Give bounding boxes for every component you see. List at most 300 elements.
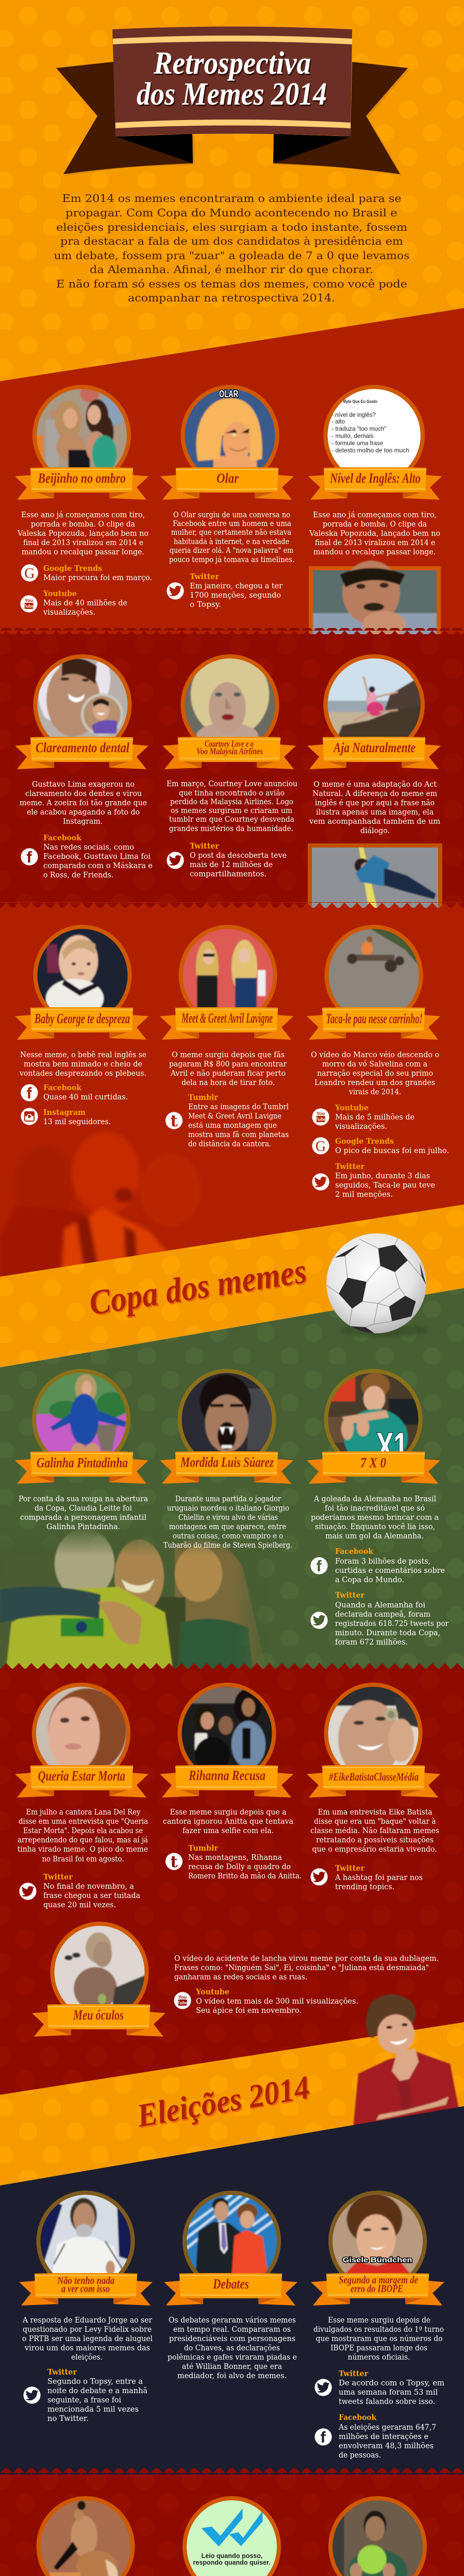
ribbon: Mordida Luis Suárez: Mordida Luis Súarez [180, 1454, 274, 1470]
ribbon: Clareamento dental [15, 737, 148, 769]
stat: Youtube: Youtube [43, 589, 77, 598]
stat: Twitter: 1700 menções, segundo [190, 591, 281, 600]
text: Clareamento description: ele acabou apagando a foto do [27, 808, 140, 817]
stat: Youtube [174, 1988, 358, 2015]
text: Queria Estar Morta description: Estar Morta". Depois ela acabou se [23, 1827, 143, 1835]
photo: 7 X 0: X1 [376, 1424, 408, 1469]
photo: Rihanna and Anitta [177, 1683, 276, 1784]
stat: Facebook: envolveram 48,3 milhões [339, 2442, 434, 2450]
stat: Twitter: no Twitter. [47, 2415, 89, 2423]
text: Courtney description: os memes surgiram e criaram um [171, 807, 292, 815]
ribbon: 7 X 0: 7 X 0 [360, 1455, 386, 1470]
section background: dark red after World Cup [0, 1663, 464, 2107]
stat: Facebook: Facebook [43, 834, 82, 842]
ribbon: Olar [160, 467, 294, 500]
stat: Youtube: Mais de 40 milhões de [43, 599, 127, 607]
text: Clareamento description: meme. A zoeira foi tão grande que [20, 799, 147, 807]
card: Galinha Pintadinha [15, 1369, 148, 1531]
section background: red diagonal [0, 308, 464, 641]
stat: Facebook: Facebook, Gusttavo Lima foi [43, 853, 151, 861]
text: Beijinho description: Esse ano já começamos com tiro, [21, 511, 145, 519]
text: Taca-le pau description: Leandro rendeu um dos grandes [314, 1079, 435, 1087]
stat: Twitter: frase chegou a ser tuitada [43, 1892, 140, 1900]
section background: green field [0, 1288, 464, 1669]
ribbon: Meu óculos: Meu óculos [73, 2007, 124, 2023]
heading: main title [137, 46, 327, 112]
section background: navy [0, 2106, 464, 2475]
card: Atualização do Whatsapp [164, 2496, 297, 2576]
card: Aja Naturalmente [307, 654, 442, 909]
text: Rihanna description: Esse meme surgiu depois que a [170, 1808, 287, 1817]
text: Nível de Inglês description: Valeska Popozuda, lançado bem no [309, 530, 440, 538]
text: Eike description [310, 1808, 439, 1854]
stat: Facebook: Facebook [43, 1083, 82, 1092]
photo: Beijinho no ombro [32, 385, 131, 468]
stat: Twitter [310, 1864, 423, 1891]
stat: Instagram [21, 1108, 111, 1126]
text: Debates description [168, 2316, 297, 2380]
text: Nível de Inglês description: final de 2013 viralizou em 2014 e [315, 539, 435, 547]
stat: Facebook: Foram 3 bilhões de posts, [335, 1557, 430, 1566]
photo: tweet screenshot: - formule uma frase [332, 439, 383, 447]
ribbon: Beijinho no ombro: Beijinho no ombro [38, 470, 126, 486]
ribbon: Rihanna Recusa [160, 1765, 293, 1798]
text: Taca-le pau description: virais de 2014. [349, 1088, 401, 1096]
text: Baby George description [19, 1051, 146, 1078]
stat: Tumblr [165, 1844, 302, 1880]
band: orange Eleições 2014 [0, 2022, 464, 2187]
ribbon: Queria Estar Morta [15, 1765, 148, 1798]
ribbon: Galinha Pintadinha [15, 1451, 148, 1484]
text: Aja description: vem acompanhada também de um [309, 818, 440, 826]
text: Courtney description: Em março, Courtney Love anunciou [167, 780, 297, 788]
ribbon: Rihanna Recusa: Rihanna Recusa [188, 1768, 266, 1783]
photo: Whatsapp checks: respondo quando quiser. [193, 2559, 270, 2566]
photo: Eike Batista [324, 1683, 423, 1784]
stat: Twitter: mencionada 5 mil vezes [47, 2405, 139, 2414]
stat: Tumblr: recusa de Dolly a quadro do [188, 1863, 291, 1871]
ribbon: Queria Estar Morta: Queria Estar Morta [38, 1768, 125, 1784]
stat: Tumblr: Romero Britto da mão da Anitta. [188, 1872, 302, 1880]
text: Nível de Inglês description: Esse ano já começamos com tiro, [313, 511, 437, 519]
text: Clareamento description [20, 781, 147, 826]
stat: Tumblr: Nas montagens, Rihanna [188, 1854, 282, 1862]
stat: Facebook: Quase 40 mil curtidas. [43, 1093, 128, 1101]
stat: Instagram: 13 mil seguidores. [43, 1118, 111, 1126]
stat: Twitter: compartilhamentos. [190, 870, 267, 878]
stat: Youtube [312, 1104, 415, 1131]
text: Aja description: Natural. A diferença do meme em [312, 790, 437, 798]
text: Meet & Greet description: pagaram R$ 800 para encontrar [169, 1060, 287, 1069]
text: 7 X 0 description: situação. Enquanto você lia isso, [315, 1523, 435, 1531]
text: Olar description: queria dizer olá. A "nova palavra" em [170, 547, 293, 555]
text: Queria Estar Morta description: tinha virado meme. O pico do meme [18, 1845, 148, 1854]
text: Queria Estar Morta description: disse em uma entrevista que "Queria [19, 1818, 148, 1826]
text: Eduardo Jorge description: o PRTB ser uma legenda de aluguel [22, 2335, 153, 2343]
card: Beijinho no ombro [15, 384, 152, 617]
card: 7 X 0 [307, 1369, 449, 1647]
section: fifth meme row [19, 2496, 447, 2576]
title banner [56, 27, 410, 176]
ribbon: Olar: Olar [217, 470, 239, 486]
text: Taca-le pau description: morro da vó Salvelina com a [322, 1060, 427, 1069]
text: Meu óculos description [174, 1955, 439, 1981]
stat: Tumblr: Meet & Greet Avril Lavigne [188, 1112, 281, 1121]
stat: Twitter: o Topsy. [190, 601, 221, 609]
text: Nível de Inglês description: porrada e bomba. O clipe da [323, 520, 427, 529]
stat: Twitter [314, 2369, 444, 2406]
text: Eike description: classe média. Não faltaram memes [310, 1827, 439, 1835]
stat: Twitter: Segundo o Topsy, entre a [47, 2378, 143, 2386]
stat: Youtube: Mais de 5 milhões de [335, 1113, 415, 1122]
text block: introduction: da Alemanha. Afinal, é melhor rir do que chorar. [90, 263, 373, 276]
ribbon: 7 X 0 [307, 1451, 440, 1484]
heading: Eleições 2014: Eleições 2014 [134, 2069, 312, 2134]
stat: Twitter: mais de 12 milhões de [190, 861, 273, 869]
card: Queria Estar Morta [15, 1683, 148, 1909]
ribbon: Meu óculos [32, 2004, 165, 2037]
ribbon: Meet & Greet: Meet & Greet Avril Lavigne [181, 1010, 273, 1026]
stat: Twitter: registrados 618.725 tweets por [335, 1620, 449, 1628]
photo: Meu óculos [51, 1922, 148, 2023]
stat: Twitter [310, 1591, 449, 1647]
stat: Twitter: Em janeiro, chegou a ter [190, 582, 283, 590]
photo frame: woman lying on road [308, 843, 442, 909]
stat: Twitter [19, 1873, 140, 1909]
band: orange Copa dos memes [0, 1205, 464, 1367]
text: Baby George description: Nesse meme, o bebê real inglês se [20, 1051, 146, 1059]
text: Clareamento description: clareamento dos dentes e virou [25, 790, 142, 798]
section background: dark red zigzag [0, 628, 464, 908]
text: Rihanna description: cantora ignorou Anitta que tentava [163, 1818, 293, 1826]
text: Clareamento description: Gusttavo Lima exagerou no [32, 781, 135, 789]
stat: Google Trends: Google Trends [43, 564, 102, 573]
background photo: hug tinted green [0, 1528, 268, 1669]
card: Olar [160, 385, 294, 609]
text: Taca-le pau description: narração especial do seu primo [317, 1070, 433, 1078]
ribbon: Debates: Debates [212, 2276, 249, 2292]
section: second meme row [0, 652, 464, 2576]
text: Queria Estar Morta description: arrependendo do que falou, mas aí já [18, 1836, 148, 1844]
text: Suárez description: uruguaio mordeu o italiano Giorgio [167, 1504, 289, 1513]
ribbon: Mordida Luis Suárez [160, 1451, 293, 1484]
card: Debates [164, 2191, 297, 2380]
photo: Aja Naturalmente [323, 654, 425, 755]
text block: introduction: propagar. Com Copa do Mundo acontecendo no Brasil e [65, 207, 397, 219]
stat: Facebook [310, 1547, 445, 1584]
icon: soccer ball [326, 1233, 428, 1336]
card: Meet & Greet [160, 925, 293, 1148]
card: Baby George [15, 925, 148, 1126]
stat: Twitter: minuto. Durante toda Copa, [335, 1629, 440, 1637]
card: Taca-le pau [307, 925, 449, 1199]
card: Meu óculos [32, 1922, 439, 2037]
text: Beijinho description: Valeska Popozuda, lançado bem no [17, 530, 148, 538]
card: Abundância [19, 2496, 155, 2576]
text block: introduction: acompanhar na retrospectiva 2014. [128, 292, 335, 304]
text: Meet & Greet description: O meme surgiu depois que fãs [172, 1051, 285, 1059]
stat: Twitter [167, 842, 287, 878]
text: Galinha description: Galinha Pintadinha. [46, 1523, 120, 1531]
card: Courtney Love [162, 652, 297, 878]
text: Beijinho description: final de 2013 viralizou em 2014 e [23, 539, 143, 547]
stat: Twitter: A hashtag foi parar nos [335, 1874, 423, 1882]
background: orange dotted header [0, 0, 464, 392]
text: Beijinho description [17, 511, 148, 556]
text: Taca-le pau description [311, 1051, 439, 1096]
text: Aja description [309, 781, 440, 835]
heading: main title: Retrospectiva [153, 46, 311, 81]
stat: Twitter: Twitter [335, 1162, 364, 1171]
stat: Tumblr: está uma montagem que [188, 1122, 277, 1130]
stat: Twitter: uma semana foram 53 mil [339, 2388, 438, 2397]
stat: Google Trends: Maior procura foi em março. [43, 574, 152, 582]
text block: introduction: pra destacar a fala de um dos candidatos à presidência em [60, 235, 403, 247]
stat: Twitter [167, 572, 283, 609]
stat: Google Trends [312, 1137, 449, 1155]
ribbon: Galinha Pintadinha: Galinha Pintadinha [37, 1455, 128, 1470]
text: Courtney description: tumblr em que Courtney desvenda [169, 816, 294, 824]
photo: Olar [180, 385, 279, 468]
ribbon: EikeBatistaClasseMédia [307, 1765, 440, 1798]
ribbon: Meet & Greet [160, 1007, 293, 1040]
text: Eike description: que o empresário estaria vivendo. [312, 1845, 437, 1854]
card: Rihanna Recusa [160, 1683, 302, 1880]
stat: Facebook: a Copa do Mundo. [335, 1576, 404, 1584]
text block: introduction: um debate, fossem pra "zuar" a goleada de 7 a 0 que levamos [54, 249, 409, 262]
stat: Tumblr: de distância da cantora. [188, 1140, 271, 1148]
photo: tweet screenshot: - muito, demais [332, 432, 374, 439]
text: 7 X 0 description [311, 1495, 439, 1540]
stat: Facebook: comparado com o Máskara e [43, 862, 153, 870]
stat: Tumblr [165, 1093, 289, 1148]
text: Eike description: retratando a possíveis situações [316, 1836, 434, 1844]
ribbon: Clareamento dental: Clareamento dental [36, 740, 129, 755]
background photo: crying baby tinted red [0, 1132, 217, 1278]
ribbon: Baby George [15, 1007, 148, 1040]
text: Debates description: do Chaves, as declarações [184, 2344, 280, 2352]
stat: Facebook [21, 1083, 128, 1102]
photo: Ônibus ou goiaba [328, 2496, 427, 2576]
ribbon: Não tenho nada a ver com isso: a ver com isso [61, 2283, 110, 2295]
text: Galinha description: comparada a personagem infantil [20, 1514, 146, 1522]
stat: Facebook: Facebook [339, 2413, 377, 2422]
ribbon: Courtney Love [162, 737, 296, 769]
photo: Dilma cutout [353, 1994, 459, 2133]
stat: Youtube: O vídeo tem mais de 300 mil visualizações. [196, 1997, 358, 2006]
text: Suárez description [163, 1495, 292, 1550]
photo: Lana Del Rey [32, 1683, 130, 1784]
text: Courtney description: grandes mistérios da humanidade. [169, 825, 293, 833]
text: Debates description: presidenciáveis com personagens [169, 2335, 295, 2343]
ribbon: Beijinho no ombro [15, 467, 148, 500]
card: Ônibus ou goiaba [311, 2496, 447, 2576]
text: 7 X 0 description: poderíamos mesmo brincar com a [311, 1514, 439, 1522]
card: Mordida Luis Suárez [160, 1369, 293, 1550]
stat: Twitter: 2 mil menções. [335, 1191, 393, 1199]
text: Rihanna description: fazer uma selfie com ela. [183, 1827, 274, 1835]
text block: introduction [54, 192, 409, 304]
text: Rihanna description [163, 1808, 293, 1835]
text: Clareamento description: Instagram. [63, 818, 103, 826]
stat: Youtube: visualizações. [43, 608, 95, 617]
stat: Twitter: Twitter [339, 2369, 368, 2378]
stat: Twitter: quase 20 mil vezes. [43, 1901, 116, 1909]
text: Taca-le pau description: O vídeo do Marco véio descendo o [311, 1051, 439, 1059]
stat: Facebook: milhões de interações e [339, 2433, 428, 2441]
ribbon: Não tenho nada a ver com isso [19, 2273, 153, 2306]
stat: Google Trends: O pico de buscas foi em julho. [335, 1147, 449, 1155]
stat: Instagram: Instagram [43, 1108, 86, 1117]
text block: introduction: eleições presidenciais, eles surgiam a todo instante, fossem [56, 221, 407, 233]
ribbon: Segundo a margem de erro do IBOPE: erro do IBOPE [351, 2282, 403, 2295]
text block: introduction: E não foram só esses os temas dos memes, como você pode [56, 278, 407, 290]
stat: Tumblr: mostra uma fã com planetas [188, 1131, 289, 1139]
card: Não tenho nada a ver com isso [19, 2191, 153, 2423]
text: Eike description: Em uma entrevista Eike Batista [318, 1808, 433, 1817]
ribbon: Aja Naturalmente: Aja Naturalmente [333, 740, 416, 755]
stat: Tumblr: Tumblr [188, 1093, 218, 1102]
card: Clareamento dental [15, 654, 153, 879]
ribbon: Debates [164, 2273, 297, 2306]
text: Nível de Inglês description: mandou o recalque passar longe. [313, 548, 436, 556]
stat: Youtube: Seu ápice foi em novembro. [196, 2007, 302, 2015]
text: Olar description: Facebook entre um homem e uma [173, 520, 291, 528]
stat: Google Trends: Google Trends [335, 1137, 394, 1146]
text: Meu óculos description: ganharam as redes sociais e as ruas. [174, 1973, 307, 1981]
text: Eduardo Jorge description: eleições. [71, 2353, 103, 2362]
text: Nível de Inglês description [309, 511, 440, 556]
photo: Olar: OLAR [219, 389, 238, 400]
text: 7 X 0 description: mais um gol da Alemanha. [325, 1532, 424, 1540]
stat: Tumblr: Entre as imagens do Tumbrl [188, 1103, 289, 1111]
photo: 7 X 0 [324, 1369, 423, 1470]
stat: Facebook [314, 2413, 436, 2460]
stat: Twitter: Twitter [47, 2368, 77, 2377]
ribbon: Taca-le pau [307, 1007, 440, 1040]
ribbon: Segundo a margem de erro do IBOPE [311, 2273, 444, 2306]
photo: tweet screenshot [323, 385, 425, 468]
ribbon: Nível de Inglês [308, 467, 442, 500]
text: Aja description: inglês é que por aqui a frase não [315, 799, 435, 807]
text: Meet & Greet description: Avril e não puderam ficar perto [170, 1070, 286, 1078]
text: IBOPE description [313, 2316, 444, 2362]
text: Aja description: diálogo. [360, 827, 390, 835]
photo: Dilma as Gisele: Gisele Bündchen [342, 2256, 412, 2264]
text: Courtney description [167, 780, 297, 833]
text: Galinha description: Por conta da sua roupa na abertura [19, 1495, 148, 1503]
text: Suárez description: outras coisas, como vampiro e o [173, 1532, 283, 1540]
photo: Whatsapp checks: Leio quando posso, [201, 2552, 262, 2560]
text: Eike description: disse que era um "baque" voltar à [314, 1817, 436, 1826]
text: Queria Estar Morta description [18, 1808, 148, 1863]
photo: Eduardo Jorge [36, 2191, 135, 2292]
text: Meet & Greet description [169, 1051, 287, 1087]
text: Baby George description: vontades desprezando os plebeus. [19, 1070, 146, 1078]
stat: Facebook: Facebook [335, 1547, 374, 1556]
text: Suárez description: Durante uma partida o jogador [175, 1495, 281, 1503]
stat: Twitter: trending topics. [335, 1883, 394, 1891]
text: Eduardo Jorge description: A resposta de Eduardo Jorge ao ser [22, 2316, 152, 2325]
photo: Baby George [33, 925, 132, 1026]
stat: Twitter: declarada campeã, foram [335, 1611, 430, 1619]
stat: Twitter: O post da descoberta teve [190, 852, 287, 860]
stat: Twitter: Twitter [335, 1864, 364, 1873]
stat: Twitter: tweets falando sobre isso. [339, 2398, 435, 2406]
text: Olar description: mulher, que certamente não estava [171, 529, 291, 537]
text: IBOPE description: que mostraram que os números do [316, 2335, 442, 2343]
stat: Google Trends [21, 564, 152, 582]
text: Olar description: habituada à internet, e na verdade [174, 537, 289, 546]
stat: Youtube: visualizações. [335, 1123, 387, 1131]
text: Meet & Greet description: dela na hora de tirar foto. [181, 1079, 275, 1087]
text: Debates description: Os debates geraram vários memes [169, 2316, 296, 2325]
text: Beijinho description: porrada e bomba. O clipe da [31, 520, 135, 529]
ribbon: Segundo a margem de erro do IBOPE: Segundo a margem de [339, 2274, 418, 2286]
text: IBOPE description: IBOPE passaram longe dos [330, 2344, 427, 2352]
text: Eduardo Jorge description: virou um dos maiores memes das [24, 2344, 150, 2352]
text: Baby George description: mostra bem mimado e cheio de [24, 1060, 142, 1069]
section: fourth meme row [15, 1683, 440, 2037]
photo: Luis Suárez [177, 1369, 276, 1470]
text: Debates description: em tempo real. Compararam os [173, 2326, 291, 2334]
text: Galinha description: da Copa, Claudia Leitte foi [35, 1504, 132, 1513]
photo: Whatsapp checks [183, 2496, 281, 2576]
text: Aja description: ilustra apenas uma imagem, ela [316, 808, 434, 817]
text: Queria Estar Morta description: Em julho a cantora Lana Del Rey [26, 1808, 141, 1817]
ribbon: Courtney Love: Voo Malaysia Airlines [196, 746, 263, 756]
stat: Youtube: Youtube [335, 1104, 369, 1112]
text: IBOPE description: números oficiais. [347, 2353, 410, 2362]
text: Debates description: mediador, foi alvo de memes. [177, 2372, 287, 2380]
stat: Twitter: foram 672 milhões. [335, 1638, 408, 1647]
text: Olar description: pouco tempo já tomava as timelines. [169, 556, 294, 564]
text: Courtney description: perdido da Malaysia Airlines. Logo [170, 798, 293, 806]
text: 7 X 0 description: A goleada da Alemanha no Brasil [313, 1495, 436, 1503]
photo: Clareamento dental [33, 654, 132, 737]
text: Suárez description: Chiellin e virou alvo de várias [178, 1514, 278, 1522]
ribbon: Courtney Love: Courtney Love e o [205, 739, 254, 749]
photo frame: pensive man [309, 561, 441, 638]
photo: Galinha Pintadinha [32, 1369, 130, 1470]
stat: Twitter: Twitter [335, 1591, 364, 1600]
ribbon: Baby George: Baby George te despreza [34, 1011, 130, 1026]
text: Aja description: O meme é uma adaptação do Act [313, 781, 437, 789]
text block: introduction: Em 2014 os memes encontraram o ambiente ideal para se [62, 192, 401, 205]
ribbon: Nível de Inglês: Nível de Inglês: Alto [329, 470, 421, 486]
photo: tweet screenshot: - traduza "too much" [332, 425, 386, 432]
card: Segundo a margem de erro do IBOPE [311, 2191, 444, 2460]
stat: Facebook: o Ross, de Friends. [43, 871, 113, 879]
stat: Twitter: Twitter [190, 572, 219, 581]
text: Olar description: O Olar surgiu de uma conversa no [173, 511, 290, 519]
text: Suárez description: montagens em que aparece, entre [169, 1523, 286, 1531]
stat: Twitter: Twitter [43, 1873, 73, 1882]
ribbon: Aja Naturalmente [307, 737, 441, 769]
heading: Copa dos memes: Copa dos memes [87, 1251, 309, 1323]
stat: Twitter [312, 1162, 435, 1199]
photo: Dilma as Gisele [328, 2191, 427, 2292]
stat: Twitter: Em junho, durante 3 dias [335, 1172, 430, 1180]
photo: tweet screenshot: - detesto molho de too much [332, 447, 409, 454]
text: Beijinho description: mandou o recalque passar longe. [22, 548, 144, 556]
text: Meu óculos description: Frases como: "Ninguém Sai", Ei, coisinha" e "Juliana está desmaiada" [174, 1964, 429, 1972]
text: Debates description: polêmicas e gafes viraram piadas e [168, 2353, 297, 2362]
text: Eduardo Jorge description: questionado por Levy Fidelix sobre [23, 2326, 152, 2334]
stat: Facebook: Nas redes sociais, como [43, 843, 134, 852]
photo: Kim centaur [36, 2496, 135, 2576]
text: Queria Estar Morta description: no Brasil foi em agosto. [42, 1855, 124, 1863]
